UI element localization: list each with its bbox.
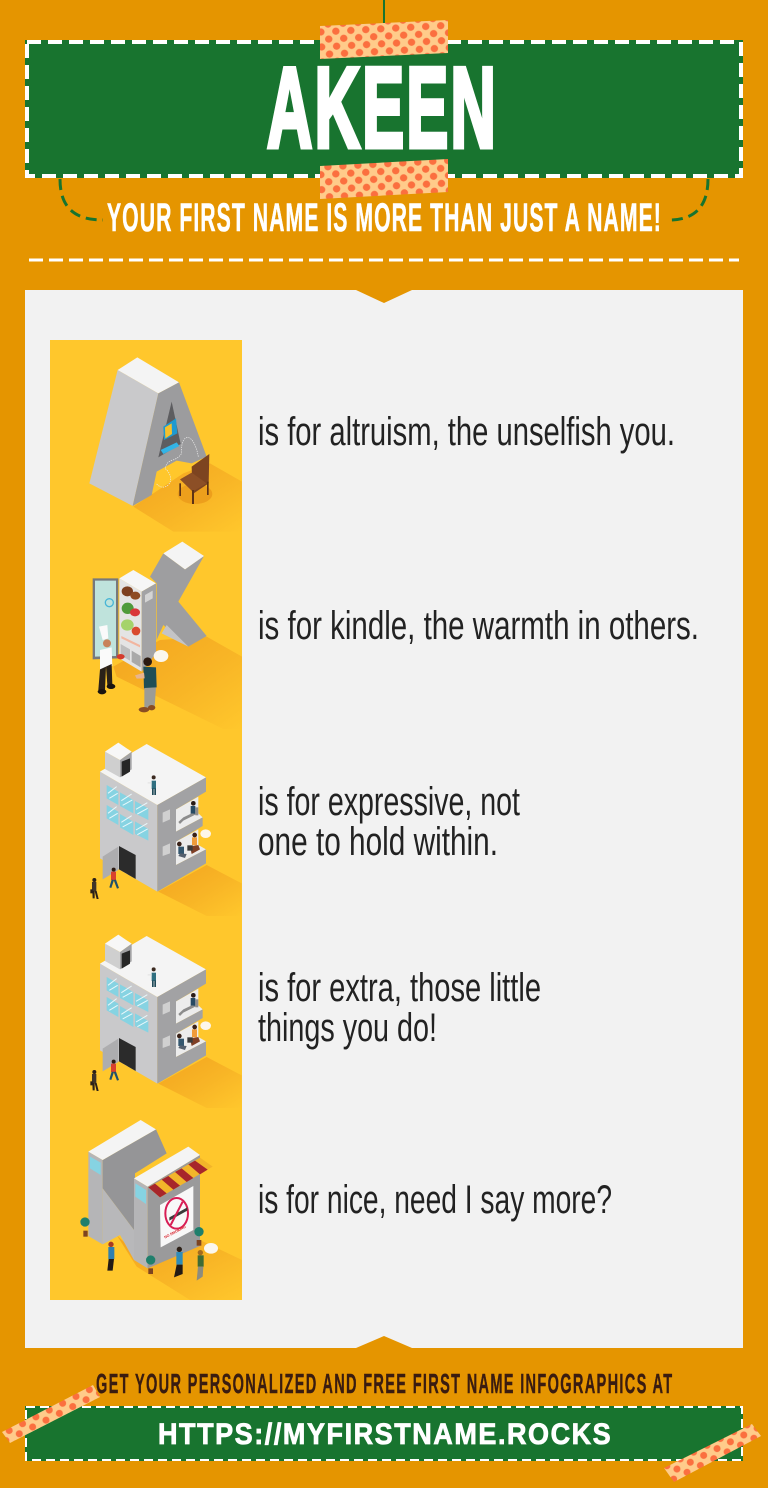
tape: top xyxy=(320,20,448,59)
tape: bottom xyxy=(320,159,448,199)
icon: letter N storefront xyxy=(80,1120,242,1300)
illustration column xyxy=(50,340,242,1300)
header banner xyxy=(25,40,743,178)
icon: letter A with desk xyxy=(89,357,242,532)
tape: footer right xyxy=(664,1424,761,1482)
tagline: YOUR FIRST NAME IS MORE THAN JUST A NAME! xyxy=(107,195,661,240)
sign caption: NO SMOKING xyxy=(164,1225,187,1240)
title: AKEEN xyxy=(267,45,496,172)
icon: letter E building, second xyxy=(90,935,242,1108)
tape: footer left xyxy=(2,1385,100,1443)
icon: letter K with fridge xyxy=(93,542,242,729)
tagline connectors xyxy=(60,179,708,220)
dashed divider xyxy=(29,258,739,262)
footer banner xyxy=(25,1406,743,1461)
icon: letter E building xyxy=(90,743,242,916)
footer call to action: GET YOUR PERSONALIZED AND FREE FIRST NAME INFOGRAPHICS AT xyxy=(96,1368,672,1399)
text: second E line xyxy=(258,966,541,1050)
text: second E line: is for extra, those little xyxy=(258,966,541,1010)
panel: content xyxy=(25,290,743,1348)
hanging thread xyxy=(383,0,385,26)
text: E line: is for expressive, not xyxy=(258,780,520,824)
text: E line: one to hold within. xyxy=(258,820,498,864)
text: N line: is for nice, need I say more? xyxy=(258,1178,612,1222)
footer url: HTTPS://MYFIRSTNAME.ROCKS xyxy=(158,1418,611,1451)
text: E line xyxy=(258,780,520,864)
text: second E line: things you do! xyxy=(258,1006,437,1050)
